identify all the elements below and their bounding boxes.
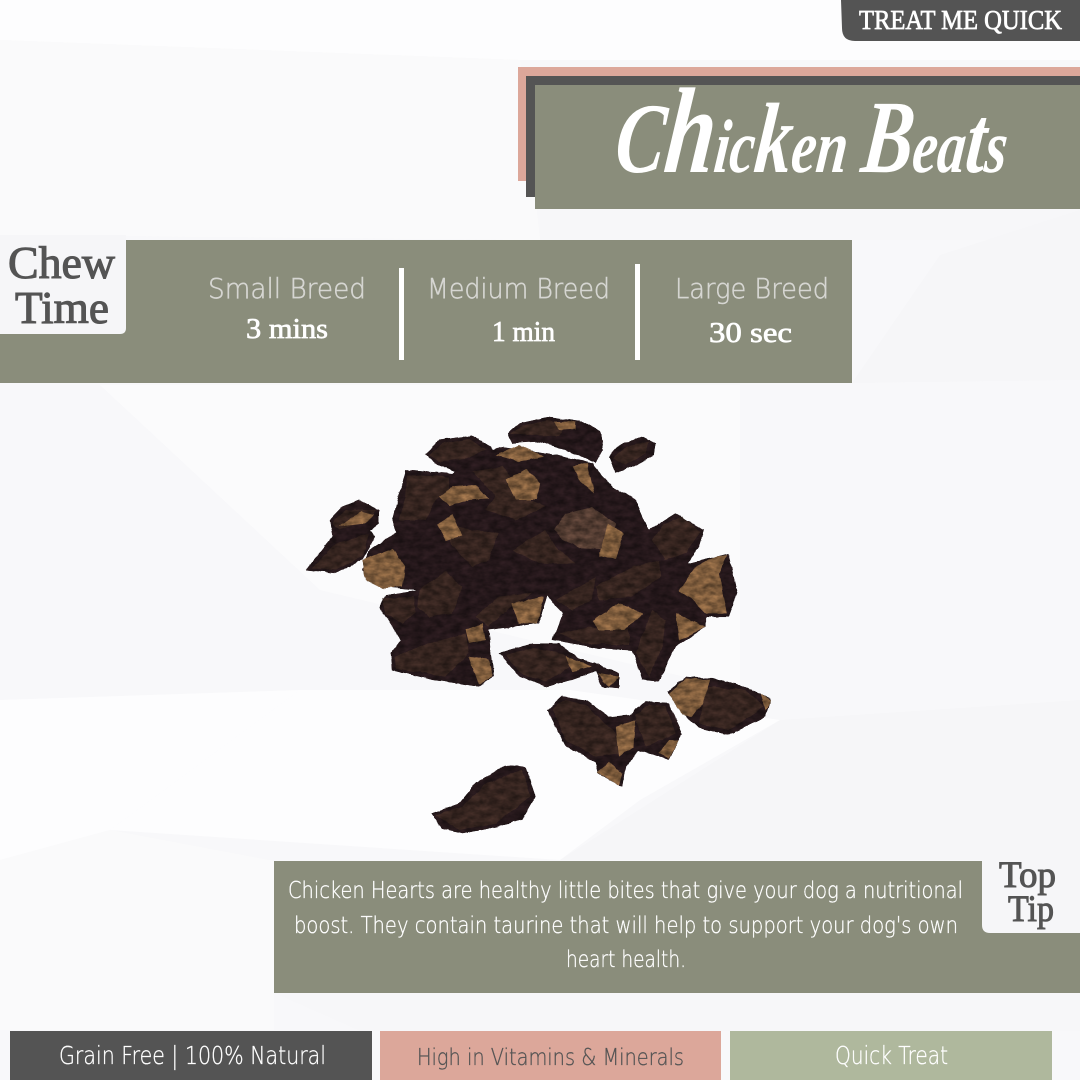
large breed: 30 sec bbox=[709, 317, 792, 349]
title panel bbox=[518, 64, 1080, 209]
medium breed bbox=[427, 272, 610, 348]
treat: glossy ball bbox=[554, 507, 616, 550]
badge: quick treat bbox=[730, 1031, 1052, 1080]
badge: grain free: Grain Free | 100% Natural bbox=[59, 1041, 326, 1070]
treat chunks: lit surfaces bbox=[312, 420, 764, 830]
chew time tag: Chew bbox=[8, 237, 116, 288]
tip text: heart health. bbox=[566, 947, 686, 973]
large breed: Large Breed bbox=[675, 272, 829, 305]
chew time tag bbox=[0, 235, 126, 334]
panel: chew time bbox=[0, 235, 852, 383]
large breed bbox=[675, 272, 829, 349]
top tip tag bbox=[982, 855, 1080, 933]
medium breed: Medium Breed bbox=[427, 272, 610, 305]
badge: quick treat: Quick Treat bbox=[835, 1041, 948, 1070]
medium breed: 1 min bbox=[492, 316, 555, 348]
tip text bbox=[288, 878, 963, 973]
product photo: chicken heart treats bbox=[306, 417, 771, 833]
badge: vitamins bbox=[380, 1031, 721, 1080]
small breed: Small Breed bbox=[208, 272, 366, 305]
small breed bbox=[208, 272, 366, 345]
tip text: boost. They contain taurine that will help to support your dog's own bbox=[294, 913, 958, 939]
treat: tan flesh patches bbox=[339, 422, 771, 785]
brand tab bbox=[841, 0, 1080, 41]
title: Chicken Beats bbox=[610, 64, 1016, 199]
panel: top tip bbox=[274, 855, 1080, 993]
chew time tag: Time bbox=[15, 282, 109, 333]
top tip tag: Tip bbox=[1008, 889, 1054, 930]
small breed: 3 mins bbox=[246, 313, 328, 345]
tip text: Chicken Hearts are healthy little bites that give your dog a nutritional bbox=[288, 878, 963, 904]
badge: vitamins: High in Vitamins & Minerals bbox=[417, 1045, 684, 1071]
brand name: TREAT ME QUICK bbox=[859, 5, 1062, 35]
top tip tag: Top bbox=[999, 855, 1056, 896]
treat chunks: dark base bbox=[306, 417, 771, 833]
badge: grain free bbox=[10, 1031, 372, 1080]
